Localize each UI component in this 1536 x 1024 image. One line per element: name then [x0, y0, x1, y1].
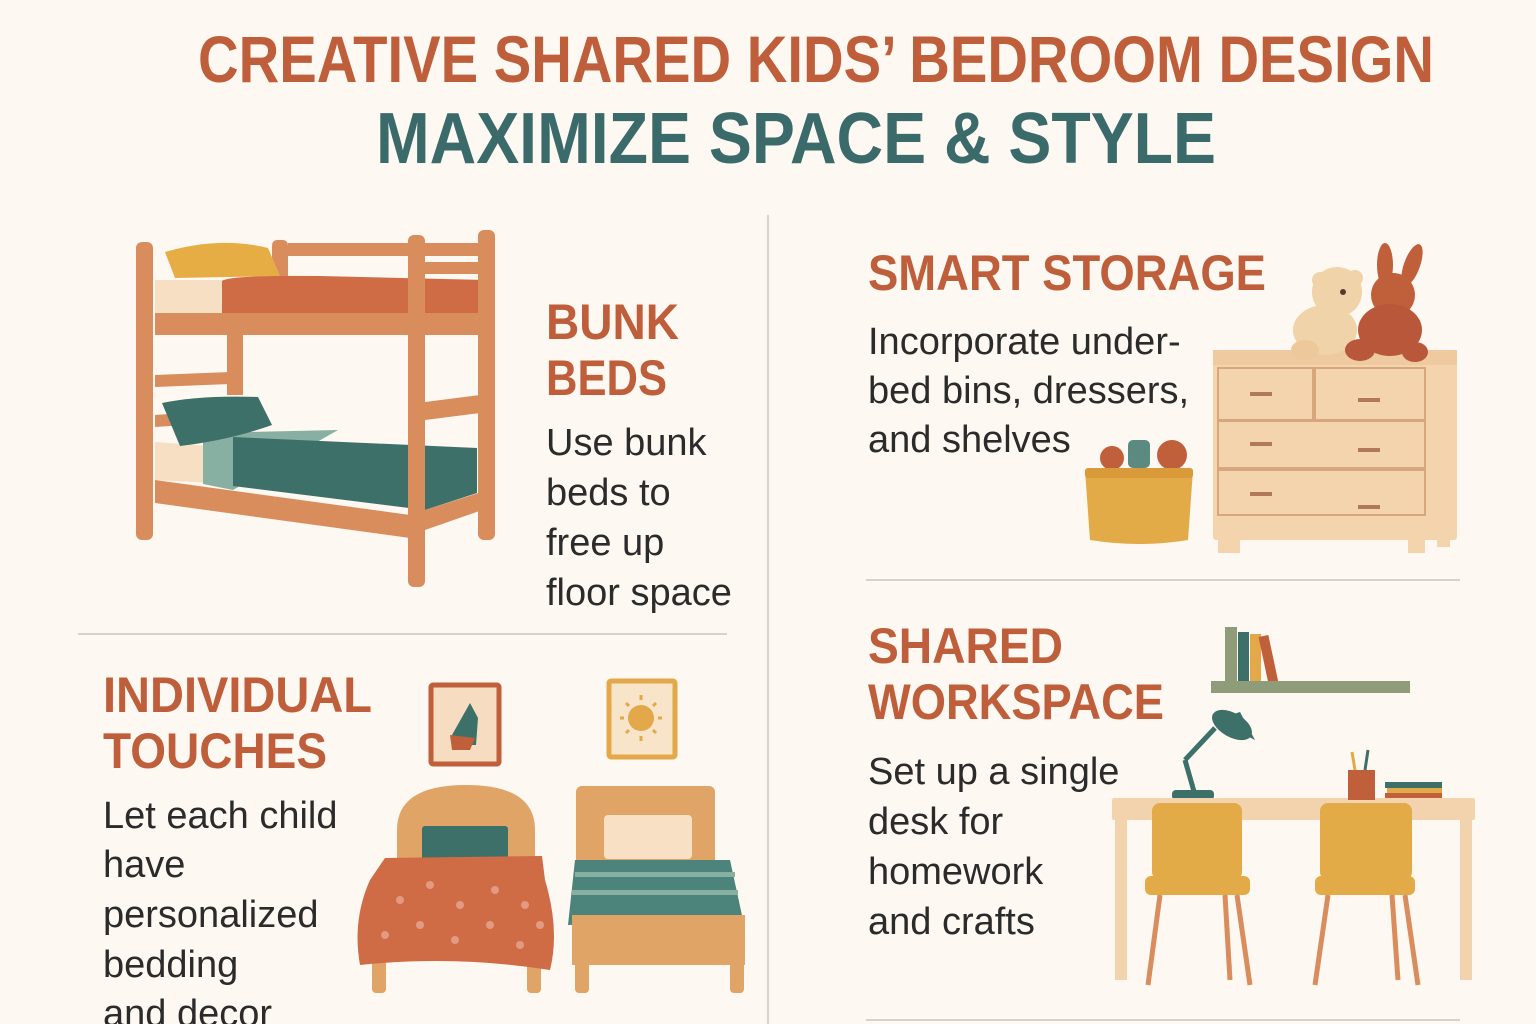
panel: shared workspace	[868, 618, 1475, 985]
panel: bunk beds: BEDS	[546, 350, 667, 406]
text: individual touches: Let each child	[103, 795, 338, 837]
icon: sun frame	[609, 681, 675, 757]
text: individual touches: personalized	[103, 894, 318, 936]
panel: shared workspace: WORKSPACE	[868, 674, 1164, 730]
heading: shared workspace: SHARED	[868, 618, 1063, 674]
text: bunk beds: floor space	[546, 572, 732, 614]
icon: dresser	[1213, 350, 1457, 553]
text: shared workspace: Set up a single	[868, 751, 1119, 793]
text: smart storage: bed bins, dressers,	[868, 370, 1189, 412]
icon: rocket frame	[431, 685, 499, 764]
text: bunk beds: free up	[546, 522, 664, 564]
icon: shelf with books	[1211, 627, 1410, 693]
icon: bed with striped blanket	[568, 786, 745, 993]
heading: individual touches: INDIVIDUAL	[103, 667, 372, 723]
heading: smart storage: SMART STORAGE	[868, 245, 1266, 301]
icon: bunk bed	[136, 230, 495, 587]
text: individual touches: bedding	[103, 944, 238, 986]
panel: smart storage	[868, 242, 1457, 553]
heading: bunk beds: BUNK	[546, 294, 679, 350]
icon: bed with polka-dot blanket	[358, 785, 554, 993]
panel: individual touches: TOUCHES	[103, 723, 327, 779]
text: shared workspace: desk for	[868, 801, 1004, 843]
icon: desk lamp	[1172, 704, 1257, 800]
icon: desk with chairs	[1112, 750, 1475, 985]
text: shared workspace: and crafts	[868, 901, 1035, 943]
text: smart storage: Incorporate under-	[868, 321, 1181, 363]
text: shared workspace: homework	[868, 851, 1044, 893]
text: smart storage: and shelves	[868, 419, 1071, 461]
text: bunk beds: beds to	[546, 472, 671, 514]
icon: toy basket	[1085, 440, 1193, 544]
text: individual touches: have	[103, 844, 185, 886]
icon: teddy bear	[1291, 267, 1363, 360]
text: bunk beds: Use bunk	[546, 422, 708, 464]
panel: individual touches	[103, 667, 745, 1024]
subtitle: MAXIMIZE SPACE & STYLE	[376, 99, 1216, 179]
panel: bunk beds	[136, 230, 732, 614]
icon: bunny	[1345, 242, 1428, 362]
